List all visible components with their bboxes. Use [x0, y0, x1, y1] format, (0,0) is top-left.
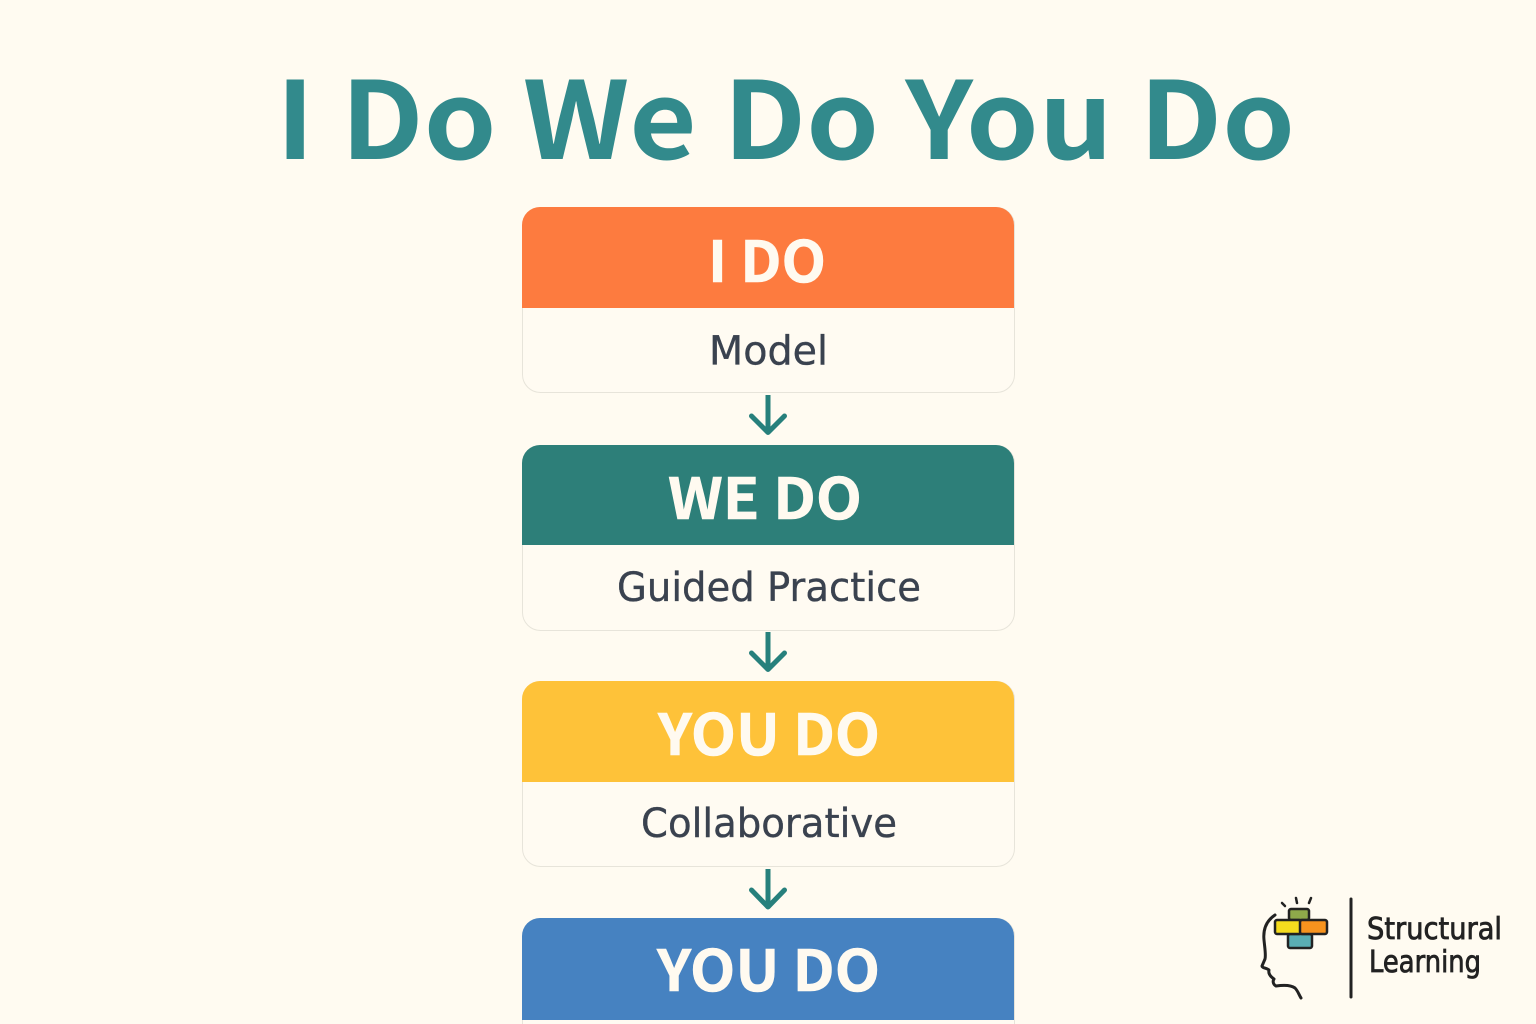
panel: You Do independent step — [522, 918, 1014, 1024]
card body: Guided Practice — [522, 446, 1014, 630]
heading: We Do: WE DO — [668, 454, 862, 536]
icon: head with blocks — [1262, 898, 1327, 998]
header band: We Do — [522, 445, 1014, 545]
arrow: We Do to You Do — [752, 632, 784, 670]
header band: You Do blue — [522, 918, 1014, 1020]
label: Model: Model — [709, 328, 828, 374]
title: I Do We Do You Do — [276, 35, 1295, 190]
heading: You Do yellow: YOU DO — [657, 690, 880, 772]
logo: Structural Learning — [1262, 898, 1502, 998]
logo text: Structural: Structural — [1367, 912, 1502, 947]
label: Guided Practice: Guided Practice — [617, 565, 921, 611]
divider line — [1350, 899, 1352, 997]
header band: You Do yellow — [522, 681, 1014, 782]
card body: Model — [522, 208, 1014, 392]
heading: I Do: I DO — [708, 217, 826, 299]
label: Collaborative: Collaborative — [641, 801, 897, 847]
logo text: Learning: Learning — [1369, 945, 1481, 980]
panel: You Do collaborative step — [522, 681, 1014, 866]
heading: You Do blue: YOU DO — [656, 926, 880, 1008]
arrow: You Do to You Do — [752, 869, 784, 907]
panel: I Do step — [522, 207, 1014, 392]
panel: We Do step — [522, 445, 1014, 630]
header band: I Do — [522, 207, 1014, 308]
card body: cropped edge — [522, 918, 1014, 1024]
arrow: I Do to We Do — [752, 395, 784, 433]
card body: Collaborative — [522, 682, 1014, 866]
